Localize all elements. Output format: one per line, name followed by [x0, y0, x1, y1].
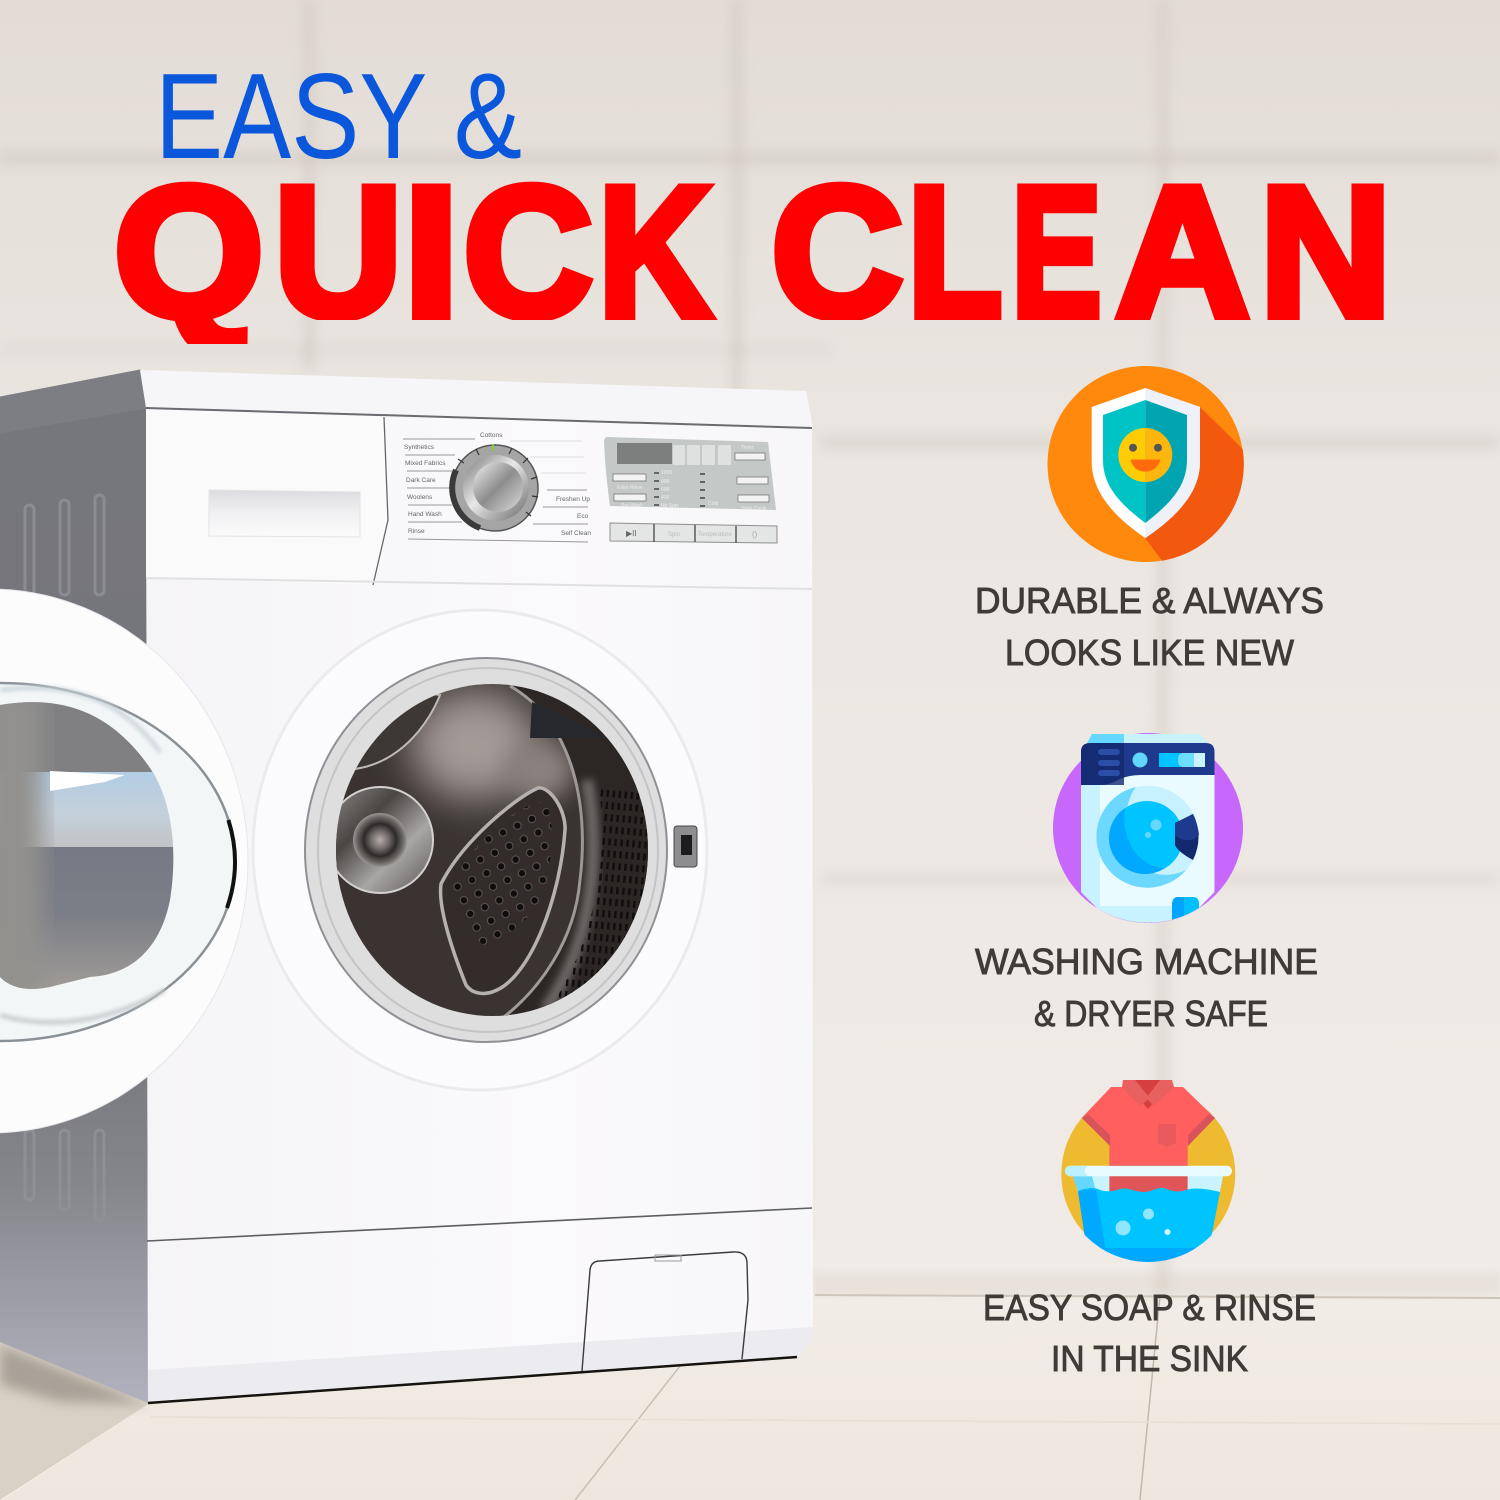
control display panel: Cold: [708, 501, 719, 507]
plinth and kick door: [147, 1208, 812, 1371]
title: QUICK CLEAN: C: [771, 149, 903, 356]
label: soap and rinse: EASY SOAP & RINSE: [983, 1287, 1316, 1328]
label: washing machine: WASHING MACHINE: [975, 941, 1318, 982]
title: QUICK CLEAN: I: [404, 149, 459, 356]
drum gasket ring: [305, 658, 667, 1042]
shield teal centre: [1103, 400, 1145, 523]
machine side panel: [0, 408, 148, 1403]
shirt pocket: [1158, 1124, 1176, 1147]
drawer panel: [146, 408, 812, 589]
control display panel: Extra Rinse: [617, 485, 643, 491]
door recess: [253, 610, 707, 1090]
title: QUICK CLEAN: E: [1012, 149, 1102, 356]
shirt collar: [1123, 1080, 1172, 1109]
title: EASY &: EASY &: [155, 48, 522, 184]
control push buttons: Temperature: [698, 532, 732, 538]
label: soap and rinse: IN THE SINK: [1051, 1338, 1248, 1379]
control labels: Woolens: [407, 494, 433, 501]
drum interior: [336, 684, 648, 1016]
control labels: Synthetics: [404, 444, 435, 451]
door latch slot: [674, 826, 697, 867]
icon door handle: [1175, 814, 1198, 860]
control push buttons: ▶II: [626, 529, 637, 538]
machine front: [146, 408, 813, 1403]
shirt: [1082, 1080, 1215, 1192]
washing machine: [0, 370, 813, 1403]
icon machine control panel: [1081, 743, 1214, 785]
drum hub: [327, 787, 433, 893]
basin rim: [1065, 1166, 1232, 1176]
perforated scoop: [441, 788, 565, 993]
control push buttons: (): [752, 530, 758, 539]
basin: [1073, 1176, 1223, 1262]
shield body: [1092, 388, 1200, 538]
drum rim band: [506, 686, 648, 1016]
floor tile seams: [0, 1296, 1500, 1500]
label: washing machine: & DRYER SAFE: [1034, 993, 1268, 1034]
control labels: Freshen Up: [556, 496, 590, 503]
control display panel: Pre-Wash: [621, 503, 643, 509]
icon corner tab: [1172, 897, 1199, 920]
control labels: Hand Wash: [408, 511, 442, 518]
icon machine body: [1081, 775, 1214, 923]
label: durable: LOOKS LIKE NEW: [1005, 632, 1294, 673]
floor shadow left of machine: [0, 1342, 150, 1500]
control display panel: 400: [661, 495, 670, 501]
icon door: [1128, 786, 1199, 888]
control display panel: No Spin: [661, 503, 679, 509]
control display panel: 600: [661, 487, 670, 493]
control display panel: [604, 437, 776, 512]
machine top side shade: [0, 370, 146, 433]
title: QUICK CLEAN: C: [463, 149, 593, 356]
control display panel: 800: [661, 479, 670, 485]
control labels: [403, 432, 591, 542]
title: QUICK CLEAN: K: [598, 149, 712, 356]
title: QUICK CLEAN: L: [908, 149, 1002, 356]
smiley face: [1118, 428, 1172, 482]
drum perforations: [550, 785, 648, 1008]
control labels: Mixed Fabrics: [405, 460, 446, 467]
icon: durable shield: [1048, 366, 1244, 562]
shield long shadow: [1145, 407, 1244, 561]
machine top surface: [140, 370, 813, 428]
title: QUICK CLEAN: A: [1116, 149, 1250, 356]
control display panel: 1000: [661, 470, 672, 476]
icon: washing machine: [1053, 733, 1243, 930]
control push buttons: [610, 523, 777, 543]
control push buttons: Spin: [668, 532, 680, 538]
control labels: Self Clean: [561, 530, 591, 537]
upper fold: [356, 694, 442, 770]
detergent drawer handle: [209, 490, 360, 537]
machine base black line: [148, 1357, 797, 1403]
lifter bar: [530, 702, 562, 738]
control labels: Dark Care: [406, 477, 436, 484]
door glass: [0, 683, 235, 1041]
floor: [0, 1296, 1500, 1500]
control labels: Rinse: [408, 528, 425, 535]
label: durable: DURABLE & ALWAYS: [975, 580, 1324, 621]
selector dial: [452, 444, 538, 531]
icon machine top: [1087, 734, 1208, 743]
machine base lip: [148, 1327, 813, 1403]
control labels: Cottons: [480, 432, 503, 439]
icon: shirt in basin: [1060, 1080, 1235, 1270]
title: QUICK CLEAN: U: [274, 149, 402, 356]
title: QUICK CLEAN: N: [1260, 149, 1392, 356]
title: QUICK CLEAN: Q: [114, 149, 264, 356]
control labels: Eco: [577, 513, 589, 520]
open door: [0, 589, 248, 1133]
control display panel: Timer: [741, 445, 754, 451]
control display panel: Stain Circle: [741, 506, 767, 512]
